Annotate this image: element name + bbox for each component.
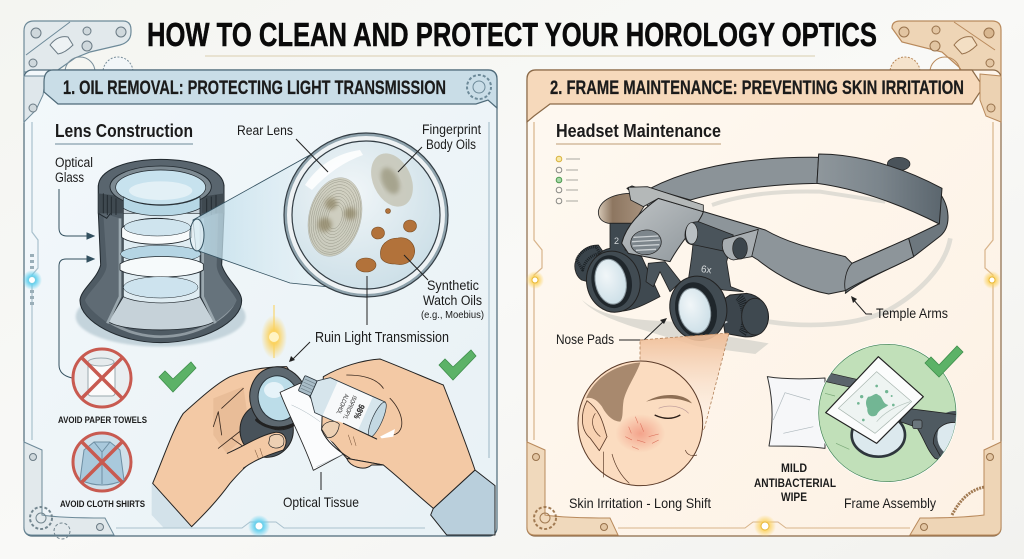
panel frame	[24, 70, 497, 536]
hinge	[722, 229, 758, 260]
corner plate: top-right lower	[980, 74, 1001, 122]
icon: loupe cross-section	[76, 159, 246, 347]
corner bottom-right	[910, 442, 1001, 535]
bottle label text: ISOPROPYL	[341, 394, 358, 421]
label: nose pads	[556, 318, 667, 347]
adjuster knob	[887, 157, 910, 171]
illustration: wiping frame assembly	[818, 344, 957, 482]
label: mild antibacterial wipe: ANTIBACTERIAL	[754, 476, 836, 490]
icon: avoid cloth shirts	[73, 433, 131, 491]
label: fingerprint body oils	[398, 122, 481, 172]
left thumb	[227, 432, 286, 483]
label: fingerprint body oils: Body Oils	[426, 137, 476, 152]
label: mild antibacterial wipe: WIPE	[781, 490, 807, 504]
label: mild antibacterial wipe	[754, 461, 836, 504]
back strap	[650, 157, 819, 200]
icon: check mark 1	[159, 362, 196, 392]
corner plate: top-right mechanism	[890, 21, 1001, 122]
label: rear lens	[237, 123, 328, 172]
inner well	[108, 197, 214, 330]
pivot	[598, 193, 646, 223]
header band	[527, 70, 980, 122]
label: temple arms	[851, 296, 948, 321]
lens stack	[120, 218, 203, 298]
top rim	[98, 159, 224, 218]
magnification cone: face	[640, 333, 729, 430]
corner plate: top-left mechanism	[24, 21, 133, 122]
illustration: antibacterial wipe	[767, 377, 825, 448]
label: ruin light transmission	[289, 330, 449, 362]
label: avoid paper towels: AVOID PAPER TOWELS	[58, 415, 147, 425]
bottle label text	[334, 391, 369, 426]
label: synthetic watch oils: Watch Oils	[423, 293, 482, 308]
left hand	[153, 367, 297, 527]
connector nodes: sides	[526, 271, 1001, 289]
arrow: optical glass leaders	[59, 189, 94, 378]
label: mild antibacterial wipe: MILD	[781, 461, 807, 475]
connector node: left	[22, 254, 42, 305]
fingerprint smudge 2	[363, 147, 421, 213]
label: optical glass: Glass	[55, 170, 84, 185]
label: optical tissue: Optical Tissue	[283, 494, 359, 510]
icon: check mark 3	[925, 346, 963, 377]
heading: headset maintenance: Headset Maintenance	[556, 121, 721, 141]
mark 2: 2	[614, 236, 619, 246]
rear pad	[817, 154, 942, 224]
magnification cone	[193, 155, 360, 290]
illustration: face with skin irritation	[578, 361, 703, 486]
6x column	[688, 225, 743, 292]
label: optical tissue	[283, 472, 359, 510]
illustration: hands cleaning loupe with tissue	[152, 359, 495, 535]
label: frame assembly: Frame Assembly	[844, 495, 936, 511]
right barrel	[720, 293, 769, 337]
corner bottom-left	[24, 442, 114, 539]
right fingers	[347, 458, 383, 468]
label: synthetic watch oils	[404, 255, 484, 321]
icon: light glow	[261, 305, 287, 359]
left ocular body	[590, 223, 660, 312]
bottle label text: ALCOHOL	[334, 393, 350, 416]
label: synthetic watch oils: Synthetic	[427, 278, 479, 293]
lens magnified view	[284, 133, 448, 297]
cylinder	[685, 222, 733, 252]
icon: check mark 2	[439, 350, 476, 380]
bottle	[293, 368, 390, 439]
left ocular ring	[581, 246, 646, 317]
right hand	[322, 359, 475, 508]
corner bottom-left	[527, 442, 618, 535]
body	[80, 185, 242, 343]
panel: frame maintenance	[526, 21, 1001, 537]
panel frame	[527, 70, 1001, 536]
heading: lens construction: Lens Construction	[55, 121, 193, 141]
label: temple arms: Temple Arms	[876, 306, 948, 321]
sleeves	[152, 483, 192, 527]
front arm	[627, 186, 914, 294]
illustration: headset oculars and housing	[575, 187, 769, 346]
top housing	[622, 198, 703, 262]
illustration: headset straps	[582, 154, 950, 354]
bottle label text: 98%	[352, 403, 367, 421]
right ocular ring	[664, 271, 733, 346]
tissue	[280, 383, 347, 470]
label: avoid cloth shirts: AVOID CLOTH SHIRTS	[60, 499, 145, 509]
right thumb	[322, 421, 403, 465]
label: rear lens: Rear Lens	[237, 123, 293, 138]
legend dots	[556, 156, 580, 204]
header band	[44, 70, 497, 108]
label: ruin light transmission: Ruin Light Transmission	[315, 330, 449, 346]
label: optical glass	[55, 155, 93, 185]
panel: oil removal	[22, 21, 497, 539]
icon: avoid paper towels	[73, 349, 131, 407]
loupe held	[240, 403, 293, 457]
heading: oil removal: 1. OIL REMOVAL: PROTECTING LIGHT TRANSMISSION	[63, 77, 446, 99]
connector node: bottom	[618, 515, 910, 537]
oil droplets	[356, 208, 416, 272]
fingerprint smudge 1	[300, 172, 370, 262]
strap shadows	[712, 191, 885, 205]
label: skin irritation long shift: Skin Irritation - Long Shift	[569, 495, 711, 511]
temple loop	[845, 192, 948, 293]
label: nose pads: Nose Pads	[556, 332, 614, 347]
label: optical glass: Optical	[55, 155, 93, 170]
bridge	[646, 262, 681, 292]
magnification mark 6x: 6x	[700, 264, 712, 276]
connector node: bottom	[116, 515, 425, 537]
label: synthetic watch oils: (e.g., Moebius)	[421, 309, 484, 321]
label: fingerprint body oils: Fingerprint	[422, 122, 481, 137]
left plate restored over frame	[24, 76, 46, 122]
left barrel	[575, 245, 607, 283]
